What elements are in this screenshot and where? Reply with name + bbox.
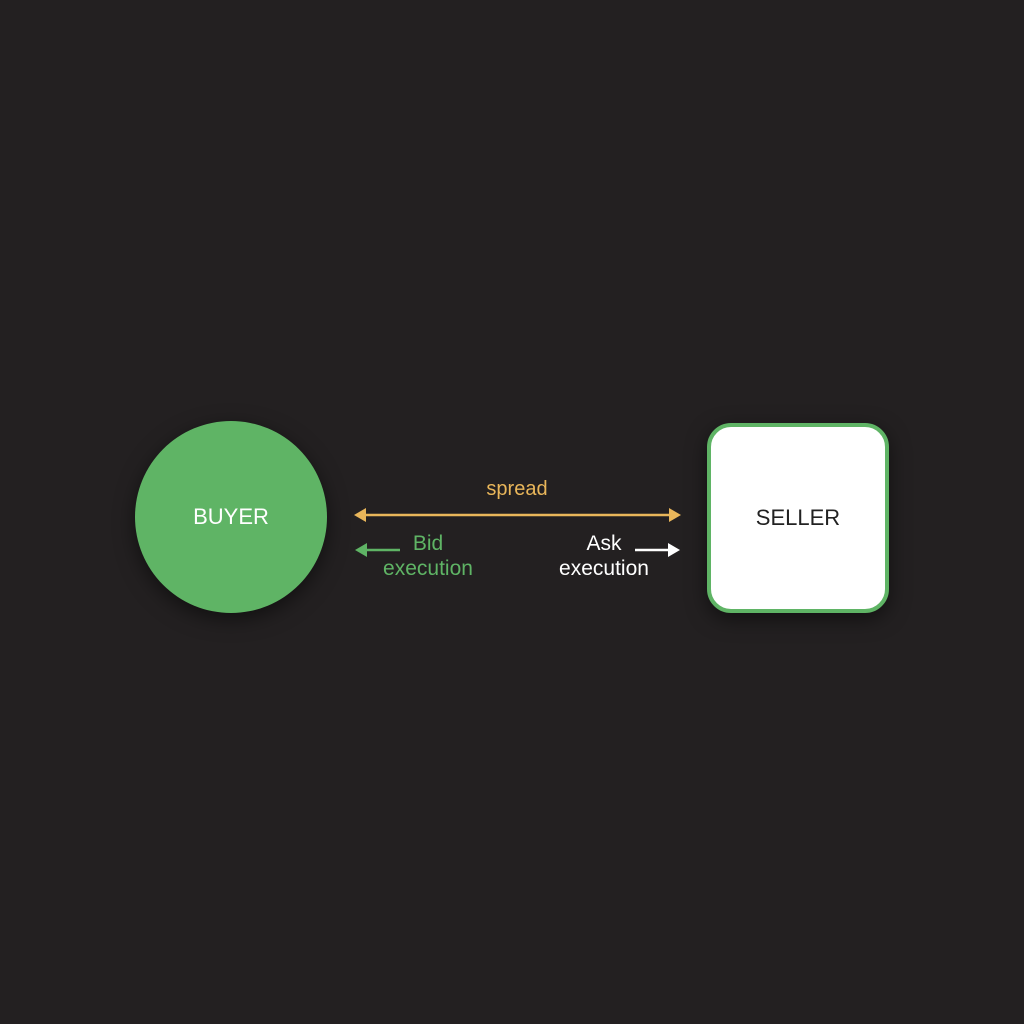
label: ask execution — [559, 532, 649, 580]
label: ask execution: execution — [559, 557, 649, 580]
node: seller box — [707, 423, 889, 613]
label: bid execution: execution — [383, 557, 473, 580]
label: spread: spread — [486, 478, 548, 500]
label: bid execution: Bid — [413, 532, 443, 555]
node: buyer circle — [135, 421, 327, 613]
node: seller box: SELLER — [756, 505, 840, 530]
node: buyer circle: BUYER — [193, 504, 269, 529]
label: bid execution — [383, 532, 473, 580]
arrow: bid execution — [355, 543, 400, 557]
arrow: ask execution — [635, 543, 680, 557]
label: ask execution: Ask — [586, 532, 622, 555]
arrow: spread double arrow — [354, 508, 681, 522]
